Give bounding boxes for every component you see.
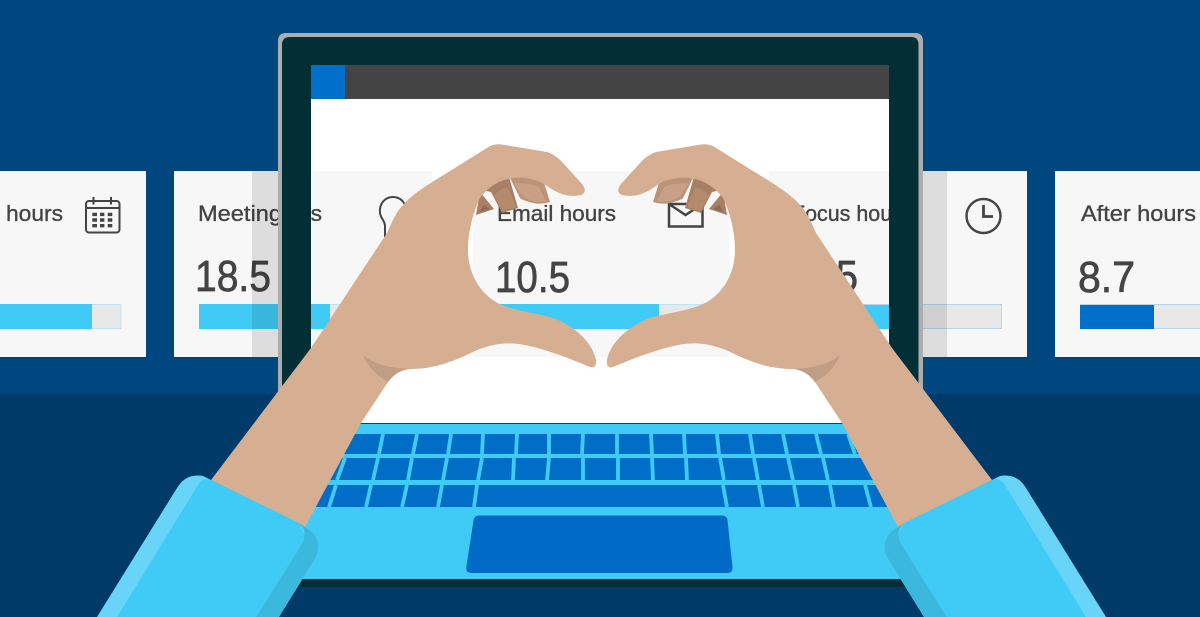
wrist crease xyxy=(363,355,410,382)
keyboard keys xyxy=(300,434,905,507)
laptop shadow on left card xyxy=(252,171,280,357)
palm and arm xyxy=(211,144,596,527)
card: focus hours xyxy=(769,171,1027,357)
laptop shadow on right card xyxy=(921,171,947,357)
card title: hours: hours xyxy=(265,201,322,226)
card number: 8.7: 8.7 xyxy=(1078,253,1135,302)
card: workweek hours xyxy=(0,171,146,357)
icon: clock xyxy=(966,199,1000,233)
card: email hours xyxy=(473,171,729,357)
progress bar xyxy=(498,304,704,329)
laptop keyboard base xyxy=(290,423,913,587)
progress bar xyxy=(0,304,121,329)
card title: focus hours: Focus hours xyxy=(792,201,910,226)
icon: envelope xyxy=(669,204,702,226)
card title: email hours: Email hours xyxy=(497,201,616,226)
icon: calendar xyxy=(86,197,120,232)
fingers xyxy=(476,170,550,215)
card: after hours xyxy=(1055,171,1200,357)
card title: after hours: After hours xyxy=(1081,201,1196,226)
left hand xyxy=(211,144,596,527)
progress bar xyxy=(199,304,406,329)
card title: hours: hours xyxy=(6,201,63,226)
wrist crease xyxy=(793,355,840,382)
right hand xyxy=(607,144,992,527)
progress bar xyxy=(1080,304,1200,329)
left sleeve xyxy=(97,476,318,617)
laptop screen xyxy=(311,65,889,423)
card number: 18.5: 18.5 xyxy=(195,252,271,301)
background: upper wall xyxy=(0,0,1200,394)
card title: meeting: Meeting xyxy=(198,201,282,226)
app tile xyxy=(311,65,345,99)
palm and arm xyxy=(607,144,992,527)
icon: light bulb xyxy=(380,197,406,236)
background: lower desk xyxy=(0,394,1200,617)
card number: 11.5 xyxy=(783,252,858,301)
card number: 10.5: 10.5 xyxy=(495,253,570,302)
right sleeve xyxy=(885,476,1106,617)
app title bar xyxy=(311,65,889,99)
progress bar xyxy=(793,304,1002,329)
fingers xyxy=(653,170,727,215)
laptop lid xyxy=(278,33,923,424)
trackpad xyxy=(466,516,733,573)
card: meeting hours xyxy=(174,171,405,357)
